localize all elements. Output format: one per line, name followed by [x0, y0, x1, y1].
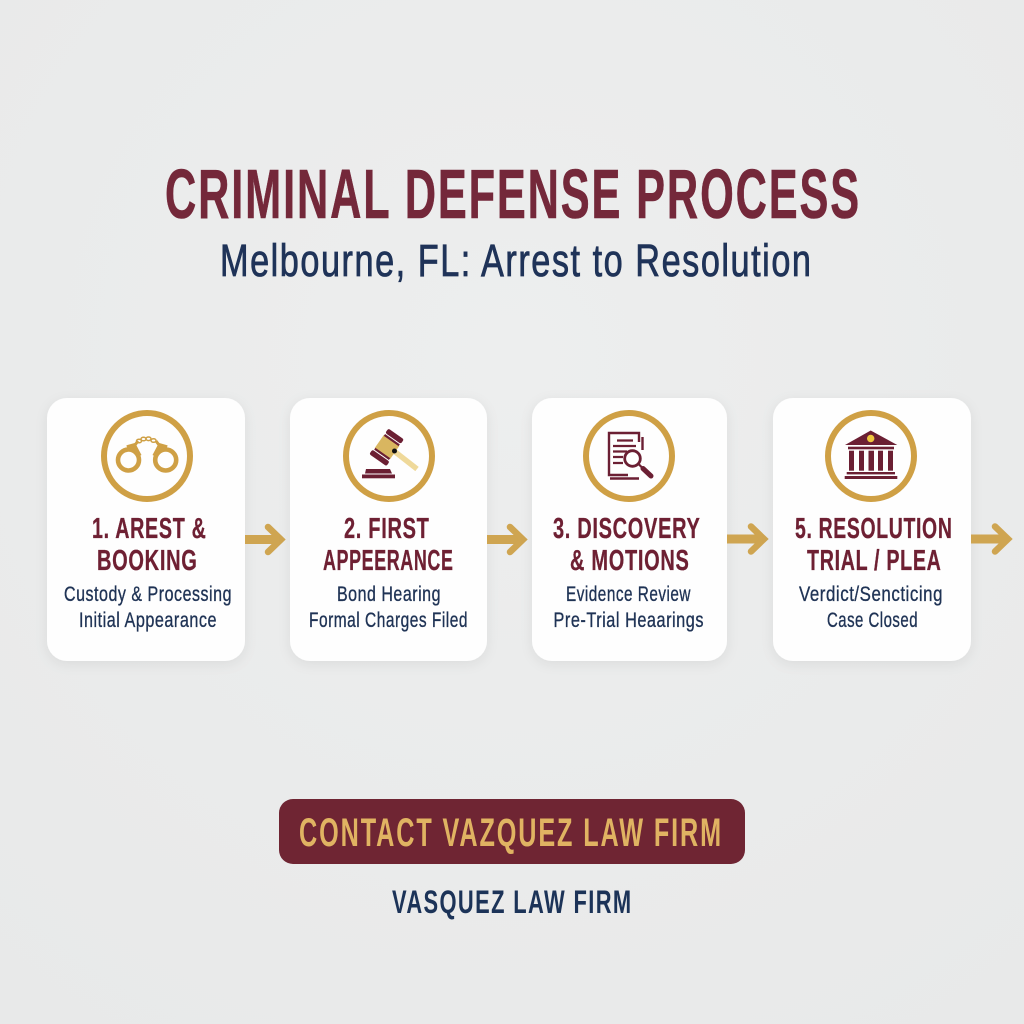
icon: handcuffs — [104, 413, 190, 499]
step 2 details — [309, 582, 468, 632]
step 5 details: Verdict/Sencticing — [799, 582, 943, 606]
step 5 heading: TRIAL / PLEA — [807, 545, 942, 577]
step 2 details: Formal Charges Filed — [309, 608, 468, 632]
step 2 heading — [323, 513, 454, 577]
step 2 heading: APPEERANCE — [323, 545, 454, 577]
arrow 2 — [487, 527, 523, 552]
step 3 heading — [553, 513, 700, 577]
firm name: VASQUEZ LAW FIRM — [392, 884, 632, 920]
step 1 heading: 1. AREST & — [92, 513, 206, 545]
step 1 details: Custody & Processing — [64, 582, 232, 606]
panel: step 3 discovery and motions — [532, 398, 727, 661]
step 5 heading: 5. RESOLUTION — [795, 513, 952, 545]
arrow 3 — [727, 526, 764, 552]
step 5 details — [799, 582, 943, 632]
step 2 details: Bond Hearing — [337, 582, 441, 606]
arrow 4 — [971, 526, 1008, 552]
panel: step 1 arrest and booking — [47, 398, 245, 661]
subtitle: Melbourne, FL: Arrest to Resolution — [220, 235, 812, 286]
step 5 details: Case Closed — [827, 608, 918, 632]
step 1 details — [64, 582, 232, 632]
step 3 details: Pre-Trial Heaarings — [554, 608, 704, 632]
panel: step 5 resolution — [773, 398, 971, 661]
step 3 details: Evidence Review — [566, 582, 691, 606]
step 2 heading: 2. FIRST — [344, 513, 430, 545]
step 5 heading — [795, 513, 952, 577]
icon: gavel — [346, 413, 432, 499]
step 1 details: Initial Appearance — [79, 608, 217, 632]
step 3 heading: 3. DISCOVERY — [553, 513, 700, 545]
step 1 heading — [92, 513, 206, 577]
call to action button: CONTACT VAZQUEZ LAW FIRM — [299, 811, 723, 855]
step 3 heading: & MOTIONS — [570, 545, 690, 577]
arrow 1 — [245, 527, 281, 552]
step 1 heading: BOOKING — [97, 545, 198, 577]
icon: courthouse — [828, 413, 914, 499]
step 3 details — [554, 582, 704, 632]
call to action button — [279, 799, 745, 864]
panel: step 2 first appearance — [290, 398, 487, 661]
icon: document with magnifier — [586, 413, 672, 499]
